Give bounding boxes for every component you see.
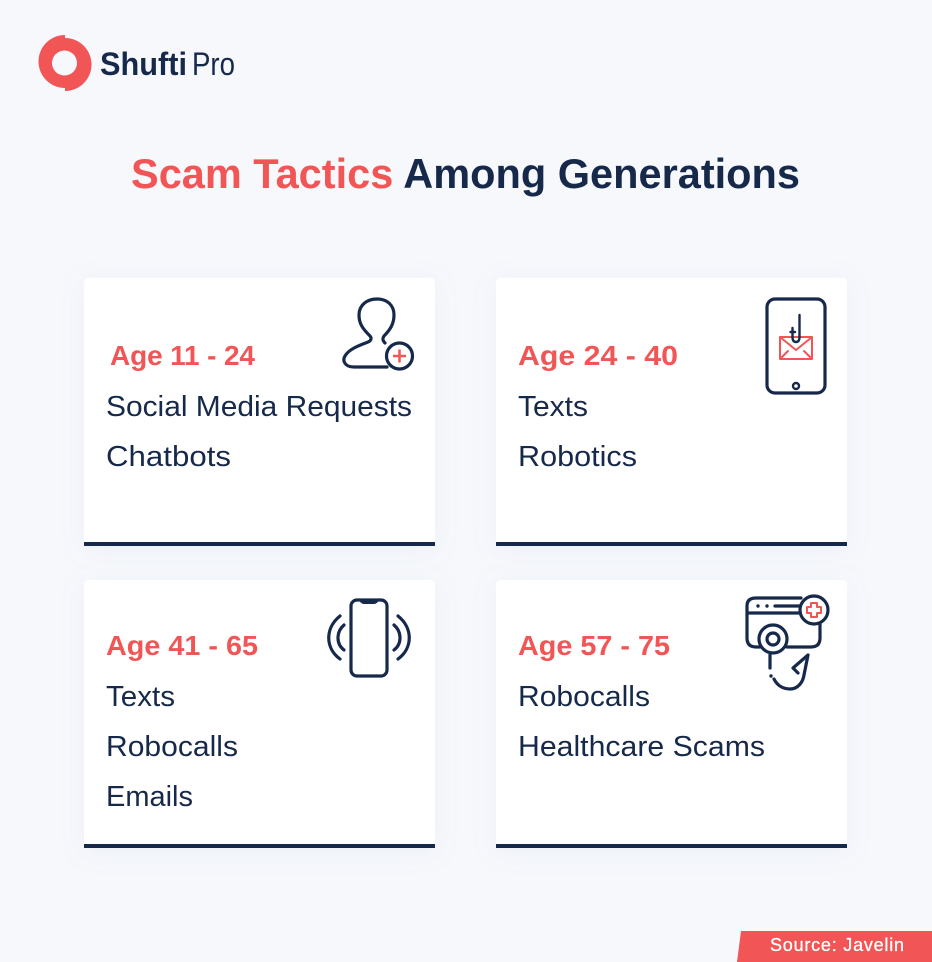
icon: healthcare phishing hook: [747, 596, 828, 689]
tactics list: Robocalls: [518, 681, 650, 713]
panel: age 24-40: [496, 278, 847, 546]
logo wordmark: Shufti: [100, 46, 187, 82]
panel: age 41-65: [84, 580, 435, 848]
tactics list: [106, 391, 412, 473]
card background: [84, 580, 435, 848]
heading: age 57-75: Age 57 - 75: [518, 630, 670, 661]
tactics list: Emails: [106, 781, 193, 813]
logo: Shufti Pro: Pro: [192, 46, 235, 82]
panel: age 57-75: [496, 580, 847, 848]
tactics list: [518, 681, 765, 763]
icon: user with plus: [344, 299, 412, 369]
tactics list: Chatbots: [106, 441, 231, 473]
title: Scam Tactics Among Generations: [131, 150, 800, 197]
tactics list: [106, 681, 238, 813]
icon: vibrating phone: [329, 600, 409, 676]
source tag: Source: Javelin: [770, 935, 904, 955]
logo ring: [39, 35, 92, 91]
tactics list: Social Media Requests: [106, 391, 412, 423]
card background: [496, 580, 847, 848]
card background: [84, 278, 435, 546]
card background: [496, 278, 847, 546]
tactics list: Texts: [106, 681, 175, 713]
logo: Shufti Pro: [39, 35, 235, 91]
source tag: [737, 931, 932, 962]
tactics list: Texts: [518, 391, 588, 423]
heading: age 11-24: Age 11 - 24: [110, 340, 255, 371]
heading: age 24-40: Age 24 - 40: [518, 340, 678, 371]
tactics list: [518, 391, 637, 473]
heading: age 41-65: Age 41 - 65: [106, 630, 258, 661]
tactics list: Robotics: [518, 441, 637, 473]
panel: age 11-24: [84, 278, 435, 546]
tactics list: Healthcare Scams: [518, 731, 765, 763]
icon: phone with phishing email: [767, 299, 825, 393]
tactics list: Robocalls: [106, 731, 238, 763]
